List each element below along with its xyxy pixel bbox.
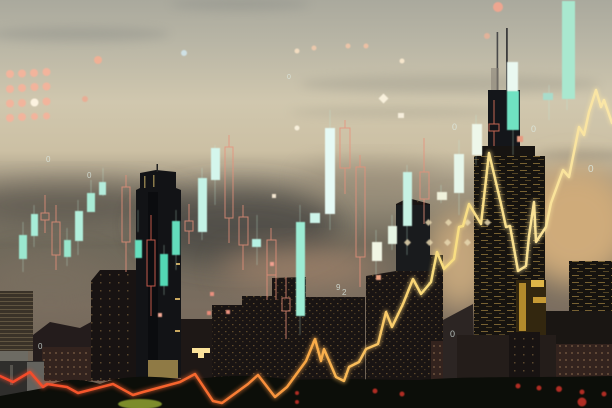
building: left pavilion	[0, 351, 44, 398]
building: red brick left	[42, 347, 108, 381]
building: far left	[0, 291, 33, 351]
small chart digits: 0	[452, 122, 457, 132]
building: centre block	[212, 277, 365, 380]
building: spire tower centre	[366, 198, 457, 385]
scattered light dots	[82, 2, 523, 317]
small chart digits: 0	[588, 164, 594, 175]
building: tall dark tower	[136, 164, 181, 378]
peach dot matrix	[6, 68, 50, 122]
small chart digits: 2	[342, 288, 347, 297]
building: lower centre right	[443, 304, 475, 380]
building: right low blocks	[457, 311, 612, 383]
small chart digits: 0	[38, 342, 43, 351]
building: gold lit tower	[516, 280, 546, 335]
small chart digits	[38, 74, 594, 351]
building: right dark block	[569, 261, 612, 311]
red bokeh lights	[295, 384, 606, 406]
building: dark mid-rise	[91, 270, 136, 380]
small chart digits: 0	[287, 74, 291, 81]
small chart digits: 0	[46, 155, 51, 164]
small chart digits: 0	[531, 124, 536, 134]
ground: tree line and lawn	[0, 376, 612, 408]
line chart: price trend	[0, 90, 612, 403]
small chart digits: 9	[336, 283, 341, 292]
building: low centre with lit sign	[181, 319, 212, 381]
building: low left block	[33, 322, 108, 380]
small chart digits: 0	[87, 171, 92, 180]
building: Willis Tower	[474, 28, 545, 340]
small chart digits: 0	[450, 329, 455, 339]
hollow red candlesticks	[41, 100, 499, 339]
mint filled candlesticks	[19, 1, 575, 335]
